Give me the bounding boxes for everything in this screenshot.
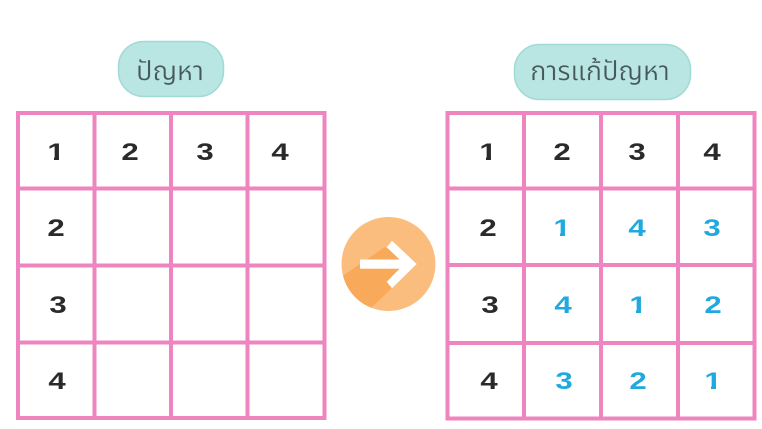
solved numbers: 2 — [629, 367, 647, 394]
given numbers: 3 — [628, 138, 646, 165]
problem grid: 2 — [47, 214, 65, 241]
solved numbers: 3 — [555, 367, 573, 394]
solved numbers: 3 — [703, 214, 721, 241]
problem grid: 2 — [121, 138, 139, 165]
solved numbers: 2 — [704, 291, 722, 318]
arrow icon — [342, 217, 436, 311]
problem grid: 4 — [271, 138, 289, 165]
problem grid — [16, 111, 326, 420]
solved numbers: 1 — [629, 291, 647, 318]
heading: solution — [514, 44, 690, 100]
heading: problem: ปัญหา — [136, 56, 204, 86]
given numbers: 2 — [553, 138, 571, 165]
problem grid: 1 — [47, 138, 65, 165]
solved numbers: 4 — [554, 291, 572, 318]
problem grid: 4 — [48, 367, 66, 394]
solved numbers: 1 — [553, 214, 571, 241]
given numbers — [479, 138, 721, 394]
problem grid: 3 — [49, 291, 67, 318]
problem grid: 3 — [196, 138, 214, 165]
given numbers: 4 — [480, 367, 498, 394]
heading: solution: การแก้ปัญหา — [530, 56, 670, 86]
solved numbers: 4 — [628, 214, 646, 241]
solved numbers — [553, 214, 722, 394]
given numbers: 1 — [479, 138, 497, 165]
given numbers: 2 — [479, 214, 497, 241]
heading: problem — [118, 42, 224, 96]
given numbers: 4 — [703, 138, 721, 165]
given numbers: 3 — [481, 291, 499, 318]
solution grid — [446, 111, 756, 420]
solved numbers: 1 — [704, 367, 722, 394]
